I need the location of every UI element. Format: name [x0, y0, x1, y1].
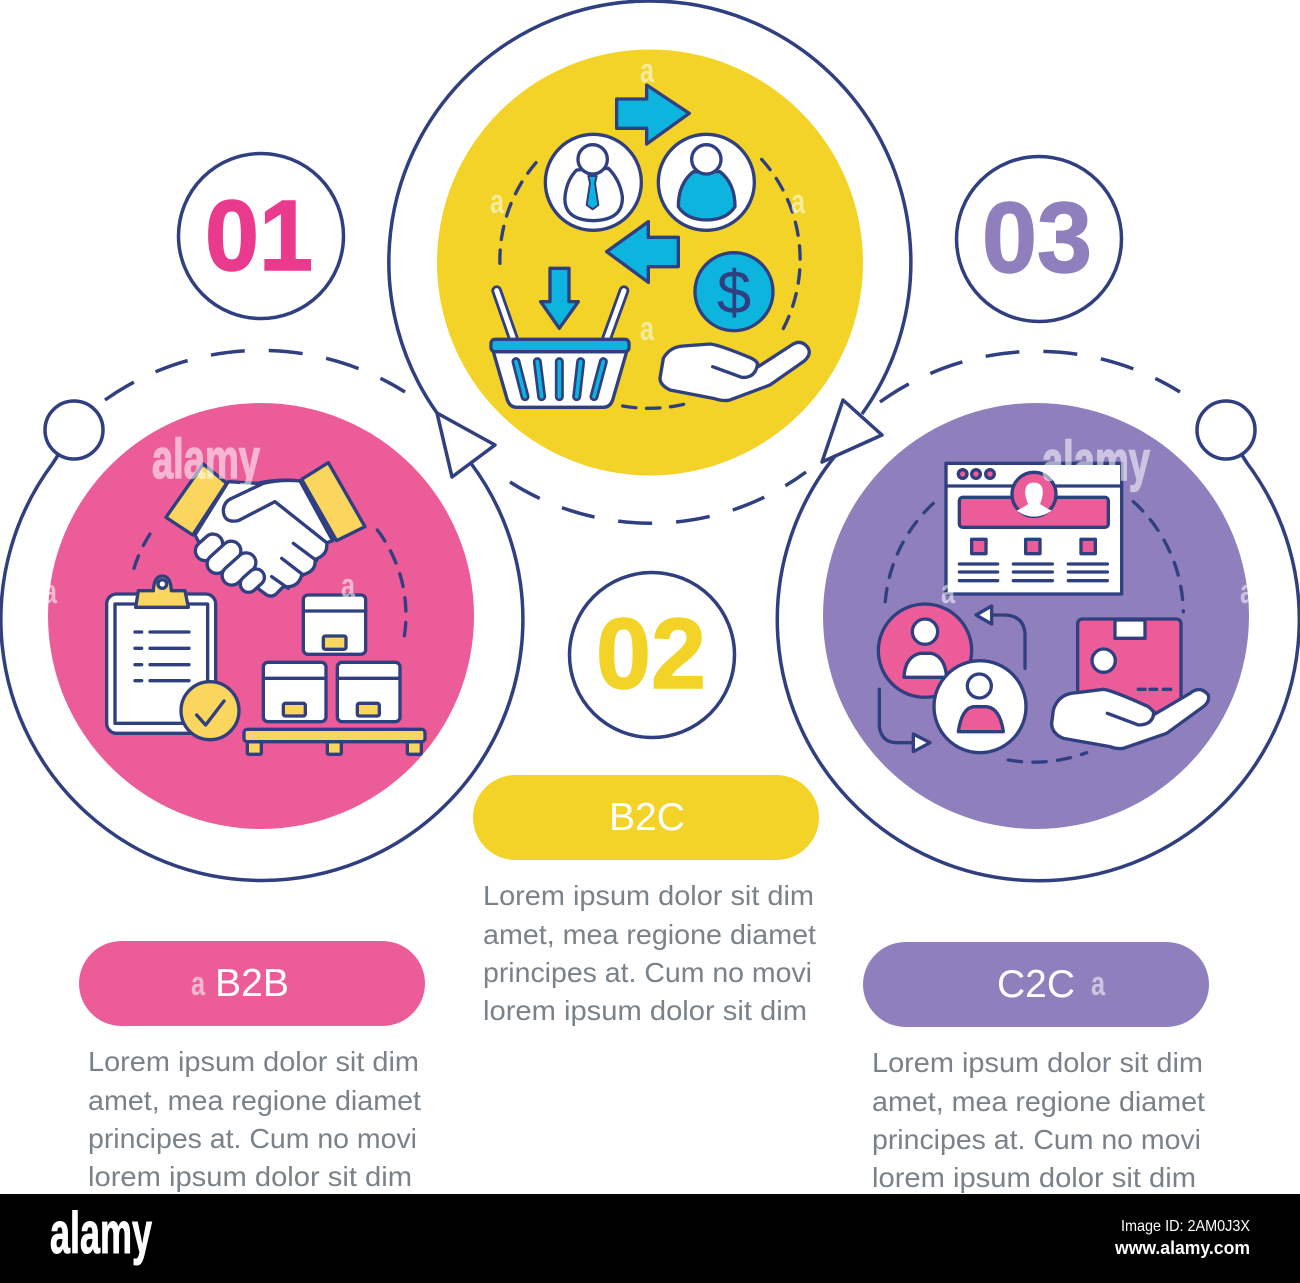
text block: C2C: amet, mea regione diamet — [872, 1086, 1205, 1117]
icon: C2C website, users and parcel — [878, 463, 1209, 762]
text block: B2C: principes at. Cum no movi — [483, 957, 812, 988]
dollar coin — [695, 253, 773, 331]
footer logo: alamy — [50, 1201, 152, 1266]
arc: B2B outline — [1, 452, 523, 880]
text block: B2B: amet, mea regione diamet — [88, 1085, 421, 1116]
pill: B2B — [79, 941, 425, 1026]
parcel — [1078, 619, 1181, 717]
dollar coin: $ — [717, 258, 751, 327]
pill: B2C: B2C — [609, 796, 685, 839]
arrow: toward C2C — [822, 400, 882, 462]
footer url: www.alamy.com — [1114, 1238, 1250, 1258]
pill: B2C — [473, 775, 819, 860]
clipboard — [107, 576, 239, 740]
dashed arc: B2C to C2C — [510, 472, 806, 523]
text block: C2C: lorem ipsum dolor sit dim — [872, 1162, 1196, 1193]
basket — [491, 291, 629, 407]
watermarks: a — [640, 310, 655, 348]
watermarks: a — [43, 573, 58, 611]
dashed arc: B2B to B2C — [105, 350, 405, 400]
boxes on pallet — [244, 595, 425, 754]
watermarks: a — [941, 573, 956, 611]
text block: B2B: principes at. Cum no movi — [88, 1123, 417, 1154]
text block: C2C: principes at. Cum no movi — [872, 1124, 1201, 1155]
number badge 02: 02 — [596, 598, 706, 710]
panel: C2C circle — [823, 403, 1249, 829]
icon: B2B handshake, clipboard and boxes — [107, 463, 425, 754]
panel: B2C circle — [437, 50, 863, 476]
text block: C2C: Lorem ipsum dolor sit dim — [872, 1047, 1203, 1078]
open hand — [1052, 689, 1209, 749]
arrow right — [617, 85, 689, 144]
number badge 01 — [178, 154, 344, 318]
watermarks: alamy — [1042, 429, 1150, 492]
watermarks: a — [490, 183, 505, 221]
watermarks: a — [791, 183, 806, 221]
number badge 02 — [570, 572, 734, 738]
dashed ring — [500, 159, 800, 408]
pill: B2B: B2B — [215, 962, 289, 1005]
watermarks: a — [1240, 573, 1255, 611]
open hand — [660, 342, 809, 401]
text block: B2B: Lorem ipsum dolor sit dim — [88, 1046, 419, 1077]
watermarks — [43, 52, 1255, 1003]
number badge 03: 03 — [982, 182, 1092, 294]
watermarks: a — [1091, 965, 1106, 1003]
panel: B2B circle — [48, 403, 474, 829]
node: right start — [1197, 401, 1255, 459]
node: left start — [45, 401, 103, 459]
dashed ring — [134, 527, 406, 645]
pill: C2C — [863, 942, 1209, 1027]
arrow left — [607, 222, 678, 282]
handshake — [166, 463, 365, 596]
footer bar — [0, 1194, 1300, 1283]
text block: B2C: Lorem ipsum dolor sit dim — [483, 880, 814, 911]
text block: B2B — [88, 1046, 421, 1192]
icon: B2C people, arrows, basket and coin — [491, 85, 809, 408]
watermarks: a — [341, 567, 356, 605]
text block: B2C — [483, 880, 816, 1026]
text block: C2C — [872, 1047, 1205, 1193]
text block: B2C: lorem ipsum dolor sit dim — [483, 995, 807, 1026]
customer person — [658, 134, 754, 230]
user two — [934, 661, 1026, 753]
arc: B2C outline — [389, 1, 911, 414]
number badge 03 — [956, 156, 1122, 322]
watermarks: alamy — [152, 427, 260, 490]
web page — [946, 463, 1122, 594]
dashed arc: C2C to B2C — [880, 351, 1180, 402]
forward arrow — [879, 689, 930, 752]
arrow down — [541, 268, 578, 328]
arc: C2C outline — [777, 452, 1299, 881]
pill: C2C: C2C — [997, 963, 1075, 1006]
flow arcs and arrows — [1, 1, 1299, 881]
dashed ring — [885, 502, 1183, 762]
arrow: toward B2C — [437, 413, 495, 477]
text block: B2B: lorem ipsum dolor sit dim — [88, 1161, 412, 1192]
person with tie — [545, 134, 641, 230]
footer image id: Image ID: 2AM0J3X — [1121, 1218, 1250, 1235]
watermarks: a — [640, 52, 655, 90]
watermarks: a — [191, 965, 206, 1003]
user one — [878, 604, 972, 697]
text block: B2C: amet, mea regione diamet — [483, 919, 816, 950]
return arrow — [976, 606, 1025, 668]
number badge 01: 01 — [205, 180, 313, 292]
